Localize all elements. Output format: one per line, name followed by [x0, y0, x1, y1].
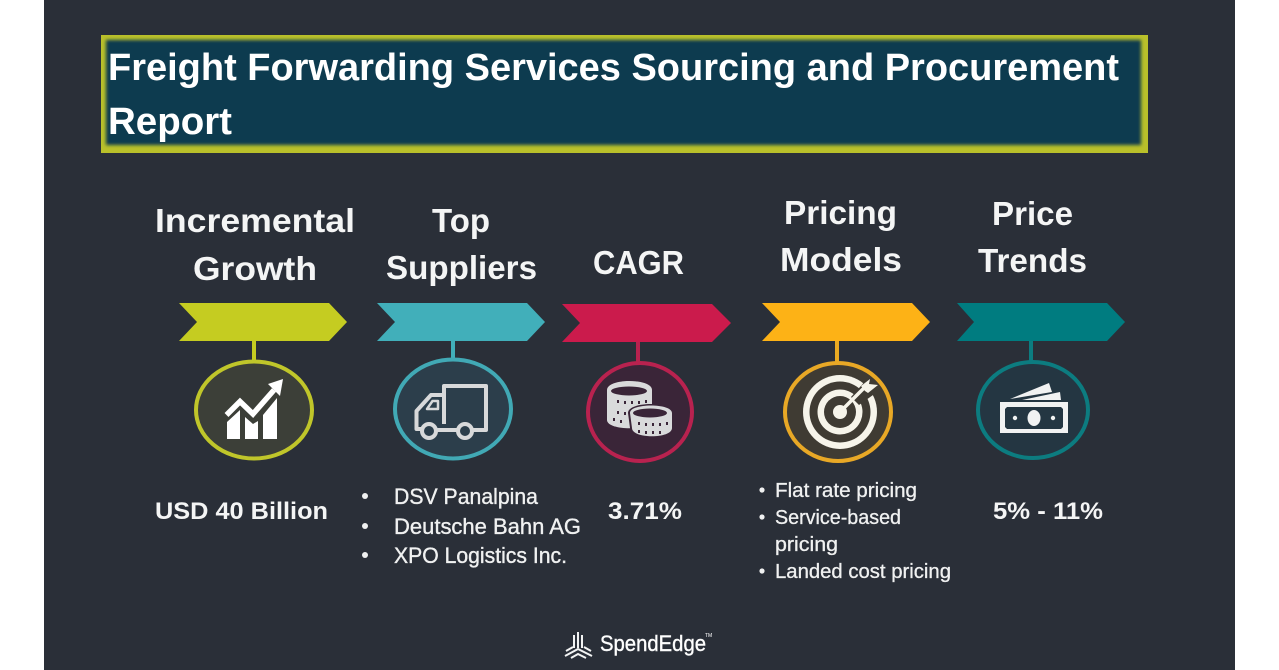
pricing model list: Flat rate pricing — [775, 480, 917, 502]
supplier list — [362, 484, 581, 568]
supplier list: Deutsche Bahn AG — [394, 514, 581, 539]
column: top suppliers — [362, 202, 581, 568]
heading: top suppliers: Suppliers — [386, 249, 537, 286]
icon circle: crimson — [588, 363, 692, 461]
column: CAGR — [562, 244, 731, 525]
supplier list: XPO Logistics Inc. — [394, 543, 567, 568]
connector: crimson — [636, 342, 640, 363]
value: USD 40 Billion: USD 40 Billion — [155, 498, 328, 525]
heading: top suppliers — [386, 202, 537, 286]
connector: amber — [835, 341, 839, 364]
icon: delivery truck — [416, 386, 486, 438]
icon circle: amber — [785, 363, 891, 461]
arrow banner: amber — [762, 303, 930, 341]
logo wordmark: SpendEdge — [600, 631, 706, 656]
icon circle: teal — [395, 360, 511, 458]
arrow banner: dark teal — [957, 303, 1125, 341]
title text: Freight Forwarding Services Sourcing and Procurement — [108, 47, 1119, 89]
arrow banner: lime — [179, 303, 347, 341]
value: 3.71%: 3.71% — [608, 498, 682, 525]
icon circle: lime — [196, 362, 312, 458]
arrow banner: teal — [377, 303, 545, 341]
column: pricing models — [759, 194, 951, 583]
heading: top suppliers: Top — [432, 202, 490, 239]
trademark: TM — [705, 633, 712, 639]
heading: price trends: Trends — [978, 242, 1087, 279]
heading: CAGR: CAGR — [593, 244, 684, 281]
icon: growth chart — [226, 379, 283, 439]
title text — [108, 47, 1119, 143]
icon circle: dark teal — [978, 362, 1088, 458]
heading: pricing models: Pricing — [784, 194, 897, 231]
logo mark — [565, 632, 592, 658]
heading: price trends — [978, 195, 1087, 279]
connector: lime — [252, 341, 256, 363]
heading: pricing models: Models — [780, 241, 902, 278]
supplier list: DSV Panalpina — [394, 484, 539, 509]
connector: teal — [451, 341, 455, 360]
pricing model list: pricing — [775, 534, 838, 556]
icon: banknotes — [1000, 383, 1068, 433]
pricing model list: Landed cost pricing — [775, 561, 951, 583]
icon: coins — [607, 381, 674, 438]
connector: dark teal — [1029, 341, 1033, 362]
heading: incremental growth: Incremental — [155, 202, 355, 239]
title banner — [101, 35, 1148, 153]
heading: incremental growth — [155, 202, 355, 287]
SpendEdge logo — [565, 631, 712, 658]
heading: incremental growth: Growth — [193, 250, 317, 287]
value: 5% - 11%: 5% - 11% — [993, 498, 1103, 525]
pricing model list: Service-based — [775, 507, 901, 529]
pricing model list — [759, 480, 951, 583]
column: price trends — [957, 195, 1125, 525]
column: incremental growth — [155, 202, 355, 525]
icon: target with dart — [803, 375, 880, 449]
heading: price trends: Price — [992, 195, 1073, 232]
heading: pricing models — [780, 194, 902, 278]
arrow banner: crimson — [562, 304, 731, 342]
title text: Report — [108, 101, 232, 143]
